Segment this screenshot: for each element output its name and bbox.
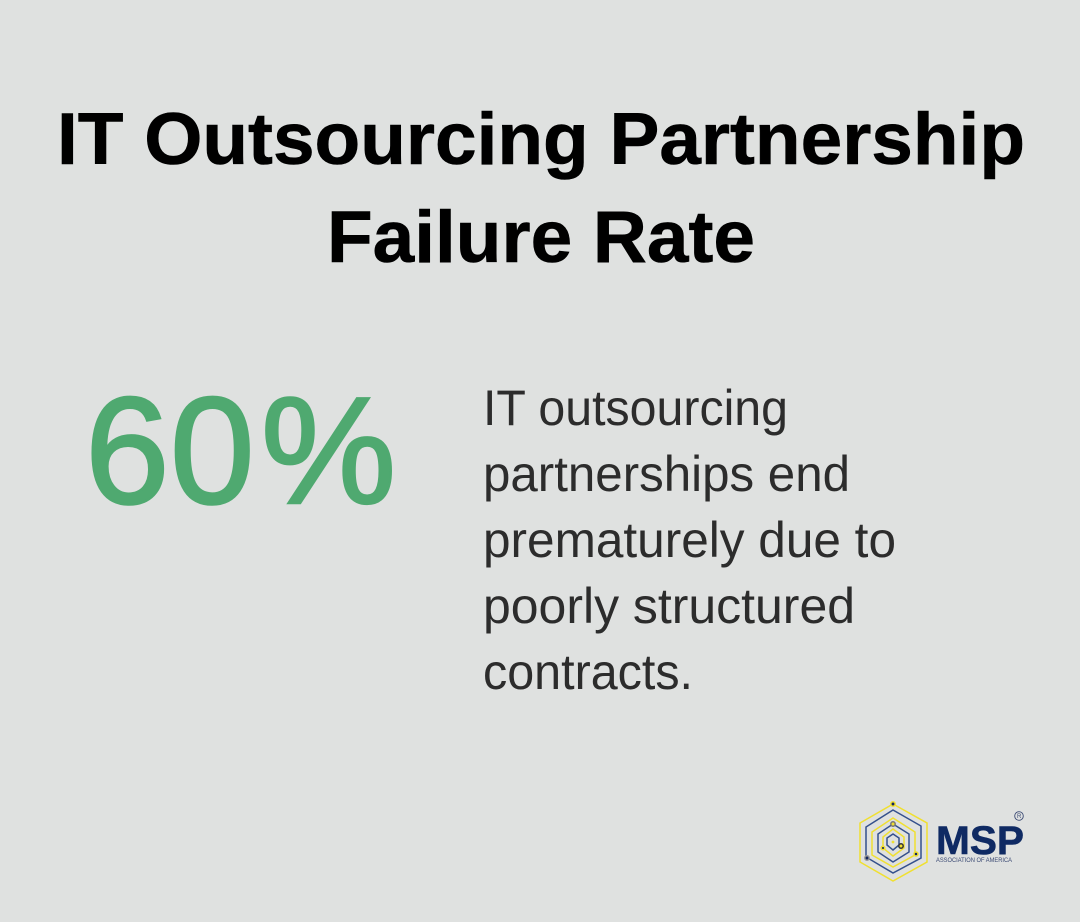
wordmark: MSP <box>936 819 1024 863</box>
description text: prematurely due to <box>483 512 896 568</box>
registered mark <box>1015 812 1023 820</box>
registered mark: R <box>1017 814 1022 820</box>
description text: contracts. <box>483 644 693 700</box>
logo: MSP Association of America <box>860 802 1024 881</box>
title: Failure Rate <box>327 197 755 278</box>
title: IT Outsourcing Partnership <box>57 99 1025 180</box>
title <box>57 99 1025 278</box>
description text: IT outsourcing <box>483 380 788 436</box>
tagline: ASSOCIATION OF AMERICA <box>936 858 1012 864</box>
description text <box>483 380 896 700</box>
description text: poorly structured <box>483 578 855 634</box>
statistic: 60%: 60% <box>85 366 396 536</box>
description text: partnerships end <box>483 446 850 502</box>
icon: hexagon circuit mark <box>860 802 927 881</box>
